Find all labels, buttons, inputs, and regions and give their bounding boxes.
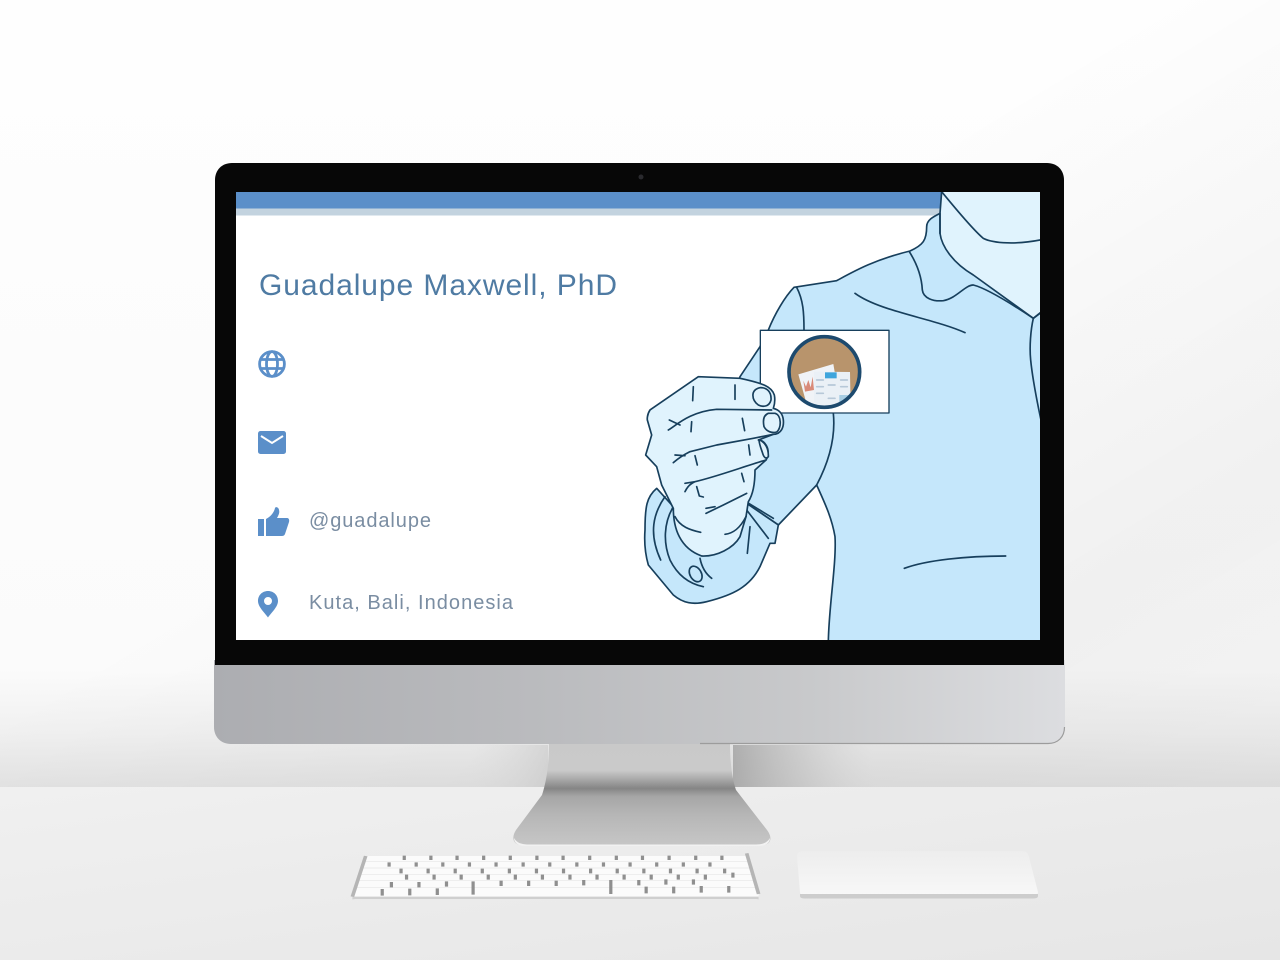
icon: envelope (258, 431, 286, 454)
keyboard plate (352, 856, 759, 900)
monitor (214, 163, 1065, 744)
cuff button (688, 565, 703, 583)
keyboard right edge (747, 853, 759, 894)
knuckle marks (691, 385, 750, 497)
keyboard row lines (355, 862, 756, 888)
keyboard left edge (352, 856, 366, 897)
business card (760, 330, 889, 413)
neck (941, 192, 1040, 317)
illustration: man holding card (645, 192, 1070, 643)
stand shadow left (470, 745, 548, 787)
profile photo (789, 337, 860, 410)
shirt fold lines (797, 287, 1006, 568)
collar (909, 252, 1033, 318)
cuff folds (654, 497, 773, 587)
title: Guadalupe Maxwell, PhD (259, 269, 617, 302)
screen background (236, 192, 1040, 640)
social handle: @guadalupe (309, 510, 431, 532)
fingernails (753, 388, 780, 458)
monitor stand (513, 744, 770, 846)
shirt cuff (645, 488, 778, 603)
top blue banner (236, 192, 944, 208)
keyboard (352, 853, 759, 900)
location: Kuta, Bali, Indonesia (309, 592, 514, 614)
icon: thumbs up (258, 507, 289, 536)
finger lines (668, 409, 773, 534)
hand (646, 377, 783, 556)
top pale banner (236, 208, 944, 216)
desk surface (0, 787, 1280, 960)
key gaps (382, 856, 733, 896)
webcam (638, 174, 644, 180)
monitor bezel (215, 163, 1064, 665)
keyboard base edge (352, 897, 759, 899)
icon: map pin (258, 591, 278, 618)
stand shadow right (733, 745, 873, 787)
shirt side seam (1030, 312, 1042, 423)
monitor chin edge (700, 727, 1064, 744)
neck edge and chin line (940, 192, 1043, 243)
shirt body and arm (723, 213, 1053, 643)
icon: globe (260, 352, 284, 376)
monitor chin (214, 660, 1065, 744)
trackpad (797, 851, 1038, 898)
